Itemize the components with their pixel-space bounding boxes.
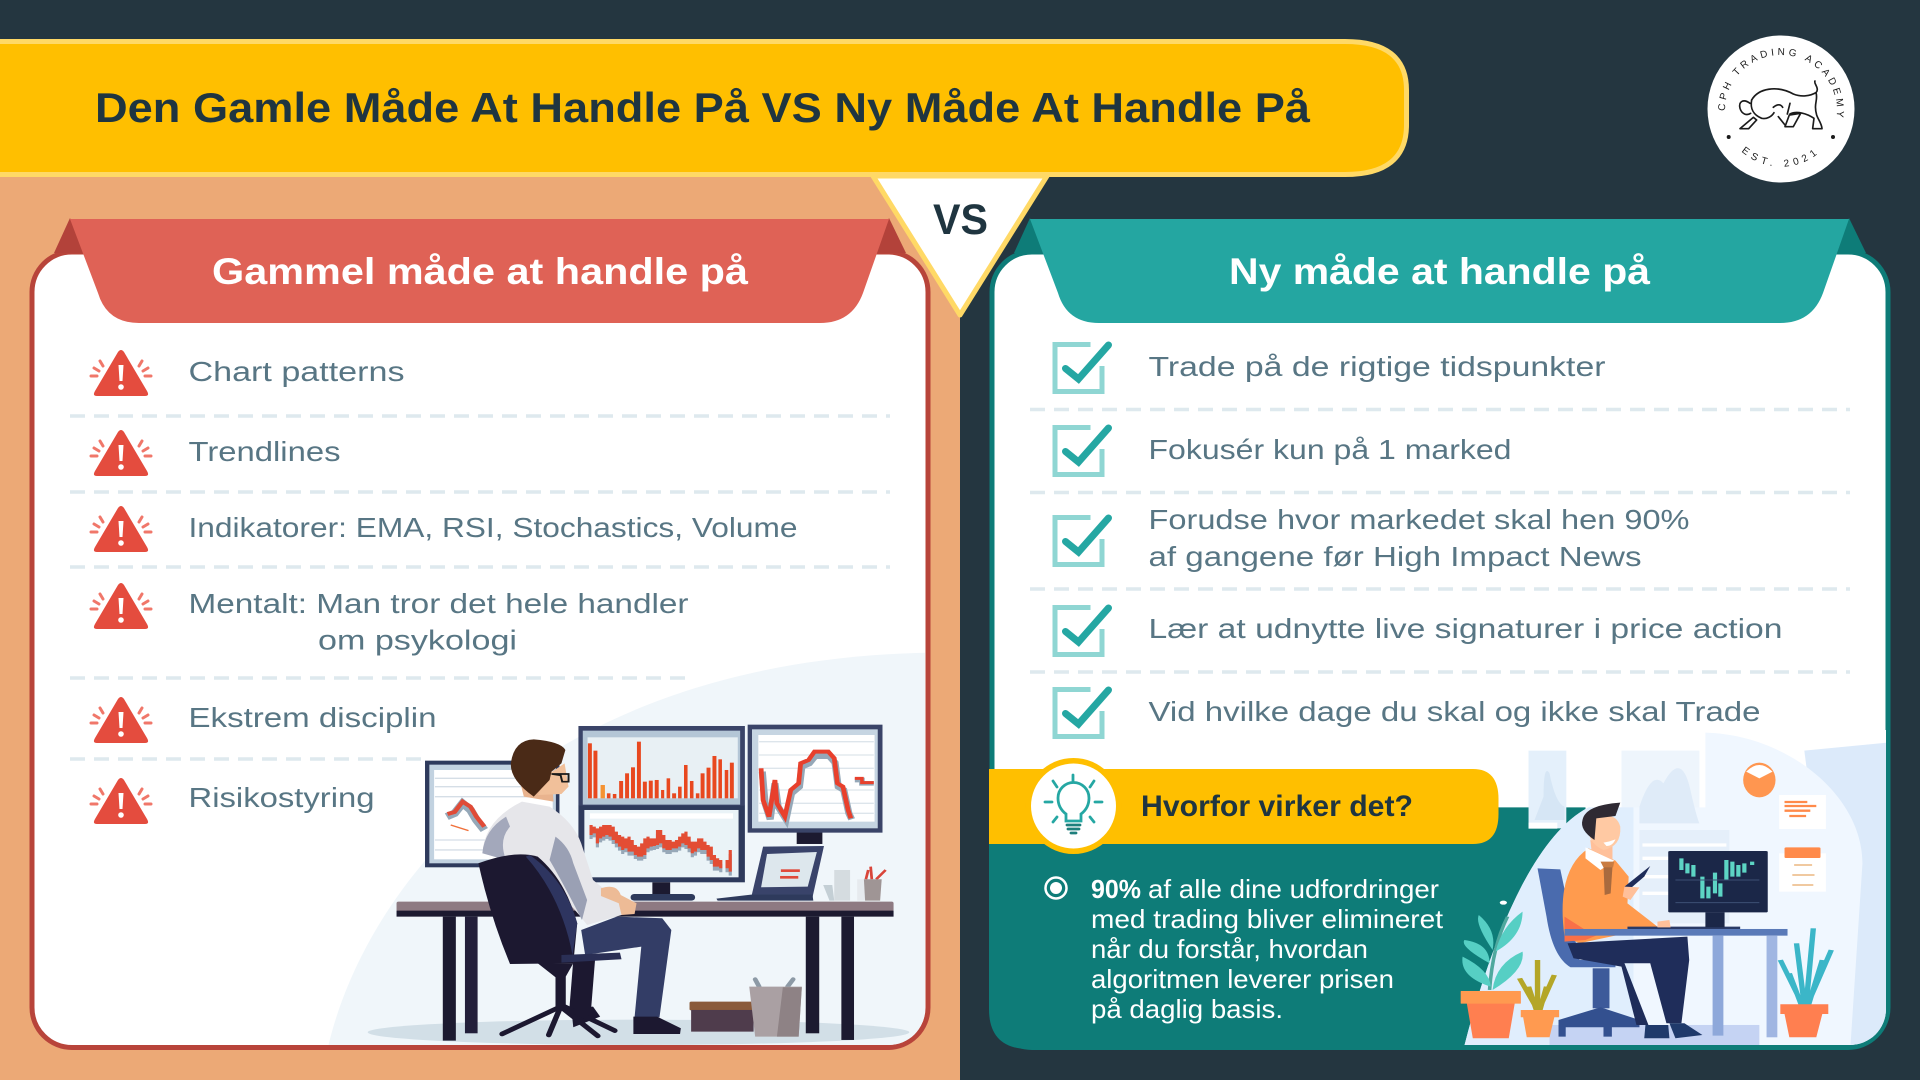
item: Risikostyring: Risikostyring — [188, 782, 374, 813]
item: Indikatorer — [91, 506, 798, 552]
title: Den Gamle Måde At Handle På VS Ny Måde At Handle På — [95, 84, 1311, 131]
desk — [397, 902, 894, 912]
plant small — [1520, 960, 1554, 1010]
item: Trade — [1055, 344, 1606, 392]
item: Lær: Lær at udnytte live signaturer i price action — [1148, 613, 1782, 644]
logo: CPH Trading Academy: EST. 2021 — [1742, 146, 1817, 167]
item: Indikatorer: Indikatorer: EMA, RSI, Stochastics, Volume — [188, 512, 798, 543]
item: Fokusér — [1055, 428, 1512, 474]
ribbon fold left — [54, 218, 84, 253]
VS triangle: VS — [933, 196, 988, 244]
dashes left — [70, 416, 890, 759]
item: Lær — [1055, 608, 1782, 654]
ribbon fold right — [875, 218, 906, 253]
explanation text with radio bullet: 90% — [1091, 874, 1141, 904]
title banner — [0, 42, 1406, 174]
illustration: trader at three monitors — [328, 653, 929, 1047]
dashes right — [1030, 410, 1850, 672]
teal explanation block — [989, 807, 1620, 1049]
man body — [1563, 848, 1657, 943]
VS triangle — [873, 176, 1047, 315]
chair — [1538, 868, 1615, 967]
explanation text with radio bullet: af alle dine udfordringer — [1148, 874, 1439, 904]
item: Fokusér: Fokusér kun på 1 marked — [1148, 434, 1512, 465]
ribbon heading: new way — [1030, 219, 1849, 323]
item: Trendlines — [91, 430, 340, 476]
monitor — [1668, 851, 1768, 912]
why-it-works banner — [989, 758, 1498, 854]
heading: why it works: Hvorfor virker det? — [1141, 790, 1413, 823]
panel: new way — [989, 218, 1897, 1049]
item: Chart patterns — [91, 350, 404, 396]
desk items — [834, 870, 850, 901]
center top monitor — [578, 726, 745, 806]
item: Chart patterns: Chart patterns — [188, 356, 404, 387]
desk — [1565, 929, 1788, 936]
explanation text with radio bullet: når du forstår, hvordan — [1091, 934, 1368, 964]
explanation text with radio bullet: på daglig basis. — [1091, 994, 1283, 1024]
explanation text with radio bullet — [1046, 874, 1444, 1024]
item: Trade: Trade på de rigtige tidspunkter — [1148, 351, 1606, 382]
item: Ekstrem disciplin: Ekstrem disciplin — [188, 702, 436, 733]
fold right — [1835, 218, 1866, 253]
right monitor — [796, 832, 822, 844]
icon: light bulb — [1026, 758, 1122, 854]
item: Forudse — [1055, 504, 1690, 572]
box and bin — [690, 1002, 754, 1010]
ribbon heading: old way — [70, 219, 889, 323]
plant right — [1780, 928, 1831, 1005]
logo: CPH Trading Academy: CPH TRADING ACADEMY — [1718, 48, 1844, 118]
ribbon heading: new way: Ny måde at handle på — [1229, 251, 1650, 292]
illustration: happy trader at desk — [1461, 730, 1897, 1047]
item: Mentalt — [91, 583, 688, 656]
left monitor — [425, 761, 559, 867]
item: Vid: Vid hvilke dage du skal og ikke skal Trade — [1148, 696, 1760, 727]
laptop — [751, 846, 824, 897]
item: Ekstrem disciplin — [91, 697, 436, 743]
item: Forudse: Forudse hvor markedet skal hen 90% — [1148, 504, 1690, 535]
explanation text with radio bullet: algoritmen leverer prisen — [1091, 964, 1394, 994]
item: Risikostyring — [91, 778, 374, 824]
item: Mentalt: om psykologi — [318, 624, 517, 656]
center bottom monitor — [578, 806, 745, 882]
wall clock — [1743, 763, 1776, 797]
item: Vid — [1055, 690, 1760, 736]
plant tall — [1490, 917, 1508, 990]
chair — [478, 854, 577, 964]
panel: old way — [32, 218, 929, 1048]
trousers — [1568, 937, 1689, 1025]
item: Forudse: af gangene før High Impact News — [1148, 541, 1642, 572]
ribbon heading: old way: Gammel måde at handle på — [212, 251, 748, 292]
person — [569, 960, 595, 1009]
logo: CPH Trading Academy — [1708, 36, 1854, 182]
fold left — [1014, 218, 1044, 253]
item: Trendlines: Trendlines — [188, 436, 340, 467]
explanation text with radio bullet: med trading bliver elimineret — [1091, 904, 1444, 934]
item: Mentalt: Mentalt: Man tror det hele handler — [188, 588, 688, 619]
wall notes — [1779, 795, 1826, 829]
monitor stand — [652, 882, 670, 895]
